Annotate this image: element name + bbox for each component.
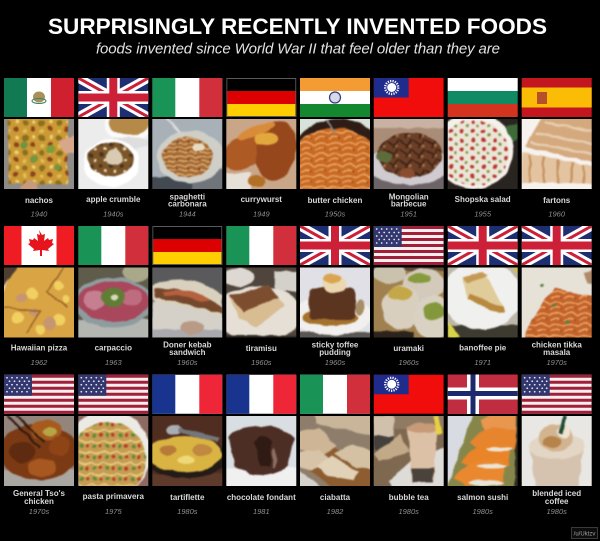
photo: General Tso's chicken: [4, 416, 74, 486]
photo: tiramisu: [226, 268, 296, 338]
title: SURPRISINGLY RECENTLY INVENTED FOODS: [48, 14, 547, 39]
label: ciabatta: ciabatta: [320, 493, 351, 502]
year: 1955: 1955: [474, 210, 492, 218]
year: 1980s: 1980s: [398, 507, 419, 516]
photo: pasta primavera: [78, 416, 148, 486]
flag: Norway: [448, 374, 518, 414]
year: 1944: 1944: [179, 210, 196, 218]
label: General Tso's chicken: chicken: [24, 497, 54, 506]
photo: salmon sushi: [448, 416, 518, 486]
label: General Tso's chicken: General Tso's: [13, 489, 66, 498]
panel: tartiflette: [144, 375, 228, 516]
panel: apple crumble: [73, 78, 153, 218]
photo: butter chicken: [300, 119, 370, 189]
label: Doner kebab sandwich: sandwich: [169, 348, 206, 357]
flag: Germany: [152, 226, 222, 265]
photo: fartons: [522, 119, 592, 189]
flag: Italy: [152, 78, 222, 117]
watermark: source tag: [572, 528, 598, 538]
panel: Doner kebab sandwich: [147, 226, 227, 367]
panel: chicken tikka masala: [517, 226, 597, 367]
year: 1981: 1981: [253, 507, 270, 516]
label: currywurst: currywurst: [241, 195, 282, 204]
flag: France: [226, 375, 296, 414]
photo: Doner kebab sandwich: [152, 268, 222, 338]
panel: bubble tea: [369, 375, 449, 516]
year: 1951: 1951: [400, 210, 417, 218]
panel: spaghetti carbonara: [147, 78, 227, 218]
year: 1950s: 1950s: [325, 210, 345, 218]
photo: blended iced coffee: [522, 416, 592, 486]
year: 1971: 1971: [474, 358, 491, 367]
photo: Mongolian barbecue: [374, 119, 444, 189]
panel: tiramisu: [214, 226, 302, 367]
label: Shopska salad: Shopska salad: [455, 195, 511, 204]
photo: Hawaiian pizza: [4, 268, 74, 338]
label: banoffee pie: banoffee pie: [459, 344, 507, 352]
year: 1949: 1949: [253, 210, 270, 218]
flag: United States: [522, 375, 592, 414]
label: spaghetti carbonara: spaghetti: [170, 192, 205, 202]
panel: Mongolian barbecue: [367, 78, 451, 218]
flag: Spain: [522, 78, 592, 117]
label: chocolate fondant: chocolate fondant: [227, 493, 296, 502]
year: 1940: 1940: [31, 210, 48, 218]
label: Mongolian barbecue: barbecue: [391, 200, 427, 208]
photo: tartiflette: [152, 416, 222, 486]
panel: uramaki: [369, 226, 454, 367]
flag: United Kingdom: [78, 78, 148, 117]
year: 1960s: 1960s: [398, 358, 419, 367]
panel: chocolate fondant: [221, 375, 301, 516]
panel: carpaccio: [73, 226, 153, 367]
flag: Taiwan: [374, 78, 444, 117]
flag: United States: [78, 375, 148, 414]
label: Doner kebab sandwich: [163, 340, 212, 357]
year: 1970s: 1970s: [546, 358, 567, 367]
panel: Shopska salad: [434, 78, 523, 218]
label: bubble tea: bubble tea: [389, 493, 429, 502]
year: 1940s: 1940s: [103, 210, 124, 218]
year: 1960: 1960: [548, 210, 566, 218]
flag: Italy: [226, 226, 296, 265]
panel: butter chicken: [289, 78, 384, 218]
panel: currywurst: [216, 78, 301, 218]
photo: chicken tikka masala: [522, 268, 592, 338]
flag: India: [300, 78, 370, 117]
panel: nachos: [0, 78, 79, 218]
photo: banoffee pie: [448, 268, 518, 338]
label: spaghetti carbonara: carbonara: [168, 200, 207, 208]
label: sticky toffee pudding: pudding: [319, 348, 351, 357]
year: 1980s: 1980s: [472, 507, 493, 516]
year: 1962: 1962: [31, 358, 48, 367]
year: 1960s: 1960s: [251, 358, 272, 367]
year: 1960s: 1960s: [325, 358, 345, 367]
label: tiramisu: tiramisu: [246, 344, 277, 353]
flag: France: [152, 375, 222, 414]
label: chicken tikka masala: [532, 340, 582, 357]
flag: Italy: [78, 226, 148, 265]
flag: United Kingdom: [522, 226, 592, 265]
label: salmon sushi: salmon sushi: [457, 493, 508, 502]
photo: nachos: [4, 119, 74, 189]
label: fartons: fartons: [543, 196, 571, 205]
label: sticky toffee pudding: [312, 340, 359, 357]
year: 1980s: 1980s: [177, 507, 198, 516]
panel: pasta primavera: [66, 375, 153, 516]
flag: Bulgaria: [448, 78, 518, 117]
panel: fartons: [517, 78, 597, 218]
photo: uramaki: [374, 268, 444, 338]
year: 1963: 1963: [105, 358, 122, 367]
flag: United States: [374, 226, 444, 265]
photo: currywurst: [226, 119, 296, 189]
label: spaghetti carbonara: [168, 192, 207, 208]
flag: United Kingdom: [300, 226, 370, 265]
year: 1970s: 1970s: [29, 507, 49, 516]
photo: chocolate fondant: [226, 416, 296, 486]
panel: banoffee pie: [442, 226, 523, 367]
watermark: source tag: /u/Uktzv: [574, 532, 595, 538]
panel: Hawaiian pizza: [0, 226, 79, 367]
label: Hawaiian pizza: Hawaiian pizza: [11, 344, 68, 352]
photo: bubble tea: [374, 416, 444, 486]
subtitle: foods invented since World War II that feel older than they are: [96, 40, 500, 58]
flag: Canada: [4, 226, 74, 265]
photo: carpaccio: [78, 268, 148, 338]
flag: Germany: [226, 78, 296, 117]
label: pasta primavera: pasta primavera: [83, 492, 145, 501]
photo: ciabatta: [300, 416, 370, 486]
label: chicken tikka masala: chicken tikka: [532, 340, 582, 350]
label: tartiflette: tartiflette: [170, 493, 205, 502]
label: butter chicken: butter chicken: [308, 196, 362, 205]
label: Doner kebab sandwich: Doner kebab: [163, 340, 212, 350]
label: carpaccio: carpaccio: [95, 344, 132, 352]
flag: Italy: [300, 375, 370, 414]
flag: Taiwan: [374, 375, 444, 414]
label: Mongolian barbecue: [389, 192, 429, 208]
label: blended iced coffee: [532, 489, 581, 506]
label: sticky toffee pudding: sticky toffee: [312, 340, 359, 350]
panel: ciabatta: [295, 375, 375, 516]
year: 1975: 1975: [105, 507, 122, 516]
panel: General Tso's chicken: [0, 375, 79, 516]
panel: blended iced coffee: [517, 375, 597, 516]
year: 1982: 1982: [327, 507, 344, 516]
label: blended iced coffee: coffee: [545, 497, 569, 506]
flag: United Kingdom: [448, 226, 518, 265]
label: General Tso's chicken: [13, 489, 66, 506]
label: uramaki: uramaki: [393, 344, 424, 353]
panel: sticky toffee pudding: [292, 226, 375, 367]
photo: sticky toffee pudding: [300, 268, 370, 338]
photo: Shopska salad: [448, 119, 518, 189]
year: 1960s: 1960s: [177, 358, 198, 367]
label: chicken tikka masala: masala: [543, 348, 571, 357]
label: blended iced coffee: blended iced: [532, 489, 581, 498]
panel: salmon sushi: [443, 374, 523, 516]
label: Mongolian barbecue: Mongolian: [389, 192, 429, 202]
flag: Mexico: [4, 78, 74, 117]
flag: United States: [4, 375, 74, 414]
year: 1980s: 1980s: [546, 507, 567, 516]
photo: apple crumble: [78, 119, 148, 189]
label: apple crumble: apple crumble: [86, 195, 141, 204]
photo: spaghetti carbonara: [152, 119, 222, 189]
label: nachos: nachos: [25, 196, 54, 205]
